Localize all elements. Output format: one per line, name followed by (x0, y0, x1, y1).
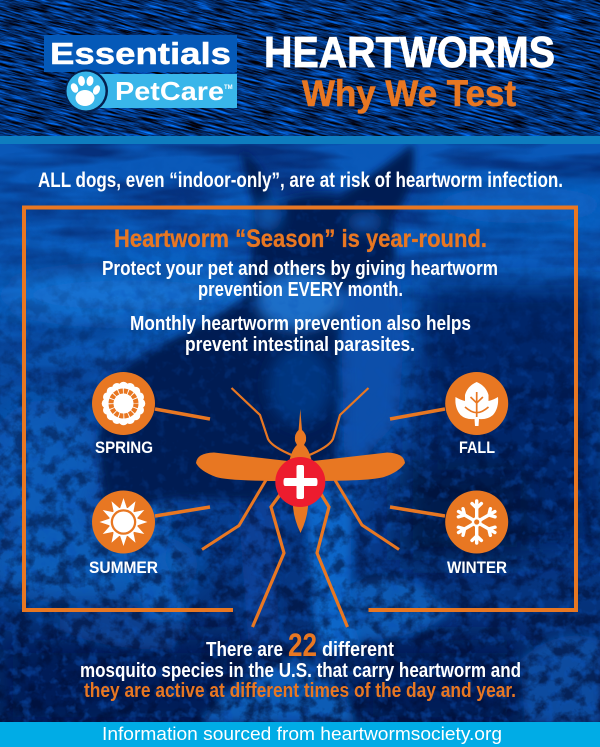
closing text: mosquito species: There are (206, 639, 283, 661)
text block: monthly prevention: Protect your pet and others by giving heartworm (102, 258, 498, 280)
label: winter: WINTER (447, 558, 507, 577)
abdomen (293, 500, 308, 533)
closing text: mosquito species: they are active at different times of the day and year. (84, 680, 516, 702)
text block: monthly prevention: prevention EVERY month. (198, 279, 403, 301)
dog light legs (120, 490, 362, 650)
antennae (232, 388, 294, 456)
text block: intestinal parasites: Monthly heartworm prevention also helps (130, 313, 471, 335)
subtitle: Why We Test (302, 73, 516, 114)
icon: winter snowflake (445, 490, 508, 554)
label: fall: FALL (459, 438, 495, 457)
footer bar (0, 722, 600, 747)
closing text: mosquito species: 22 (288, 627, 317, 663)
closing text: mosquito species: mosquito species in the U.S. that carry heartworm and (80, 660, 521, 682)
text block: intestinal parasites (130, 313, 471, 356)
red cross circle (275, 457, 325, 507)
closing text: mosquito species: different (322, 639, 394, 661)
text block: monthly prevention (102, 258, 498, 301)
footer source text: Information sourced from heartwormsociety.org (102, 724, 502, 744)
dog photo background (0, 144, 600, 730)
front legs (202, 480, 266, 550)
text block: intestinal parasites: prevent intestinal parasites. (185, 334, 415, 356)
heading: year-round season: Heartworm “Season” is year-round. (114, 225, 487, 253)
title: HEARTWORMS (264, 28, 555, 77)
logo: Essentials PetCare: Essentials (50, 36, 231, 71)
label: summer: SUMMER (89, 558, 158, 577)
icon: summer sun (92, 490, 155, 554)
rocks (60, 576, 600, 722)
mosquito illustration (196, 388, 405, 627)
white plus (284, 465, 318, 499)
logo: Essentials PetCare: PetCare (115, 76, 224, 106)
back legs (252, 494, 284, 627)
dog silhouette (98, 144, 414, 510)
season connector lines (155, 409, 445, 516)
head and proboscis (289, 409, 312, 462)
dog lighter chest and fur (254, 199, 404, 480)
icon: spring flower (92, 372, 155, 435)
header fur texture background (0, 0, 600, 136)
orange frame (24, 208, 576, 610)
closing text: mosquito species (80, 627, 521, 702)
wings (196, 452, 405, 481)
icon: fall leaf (445, 372, 508, 435)
label: spring: SPRING (95, 438, 153, 457)
header divider band (0, 136, 600, 144)
logo: Essentials PetCare: TM (224, 85, 233, 91)
logo: Essentials PetCare (44, 35, 237, 112)
